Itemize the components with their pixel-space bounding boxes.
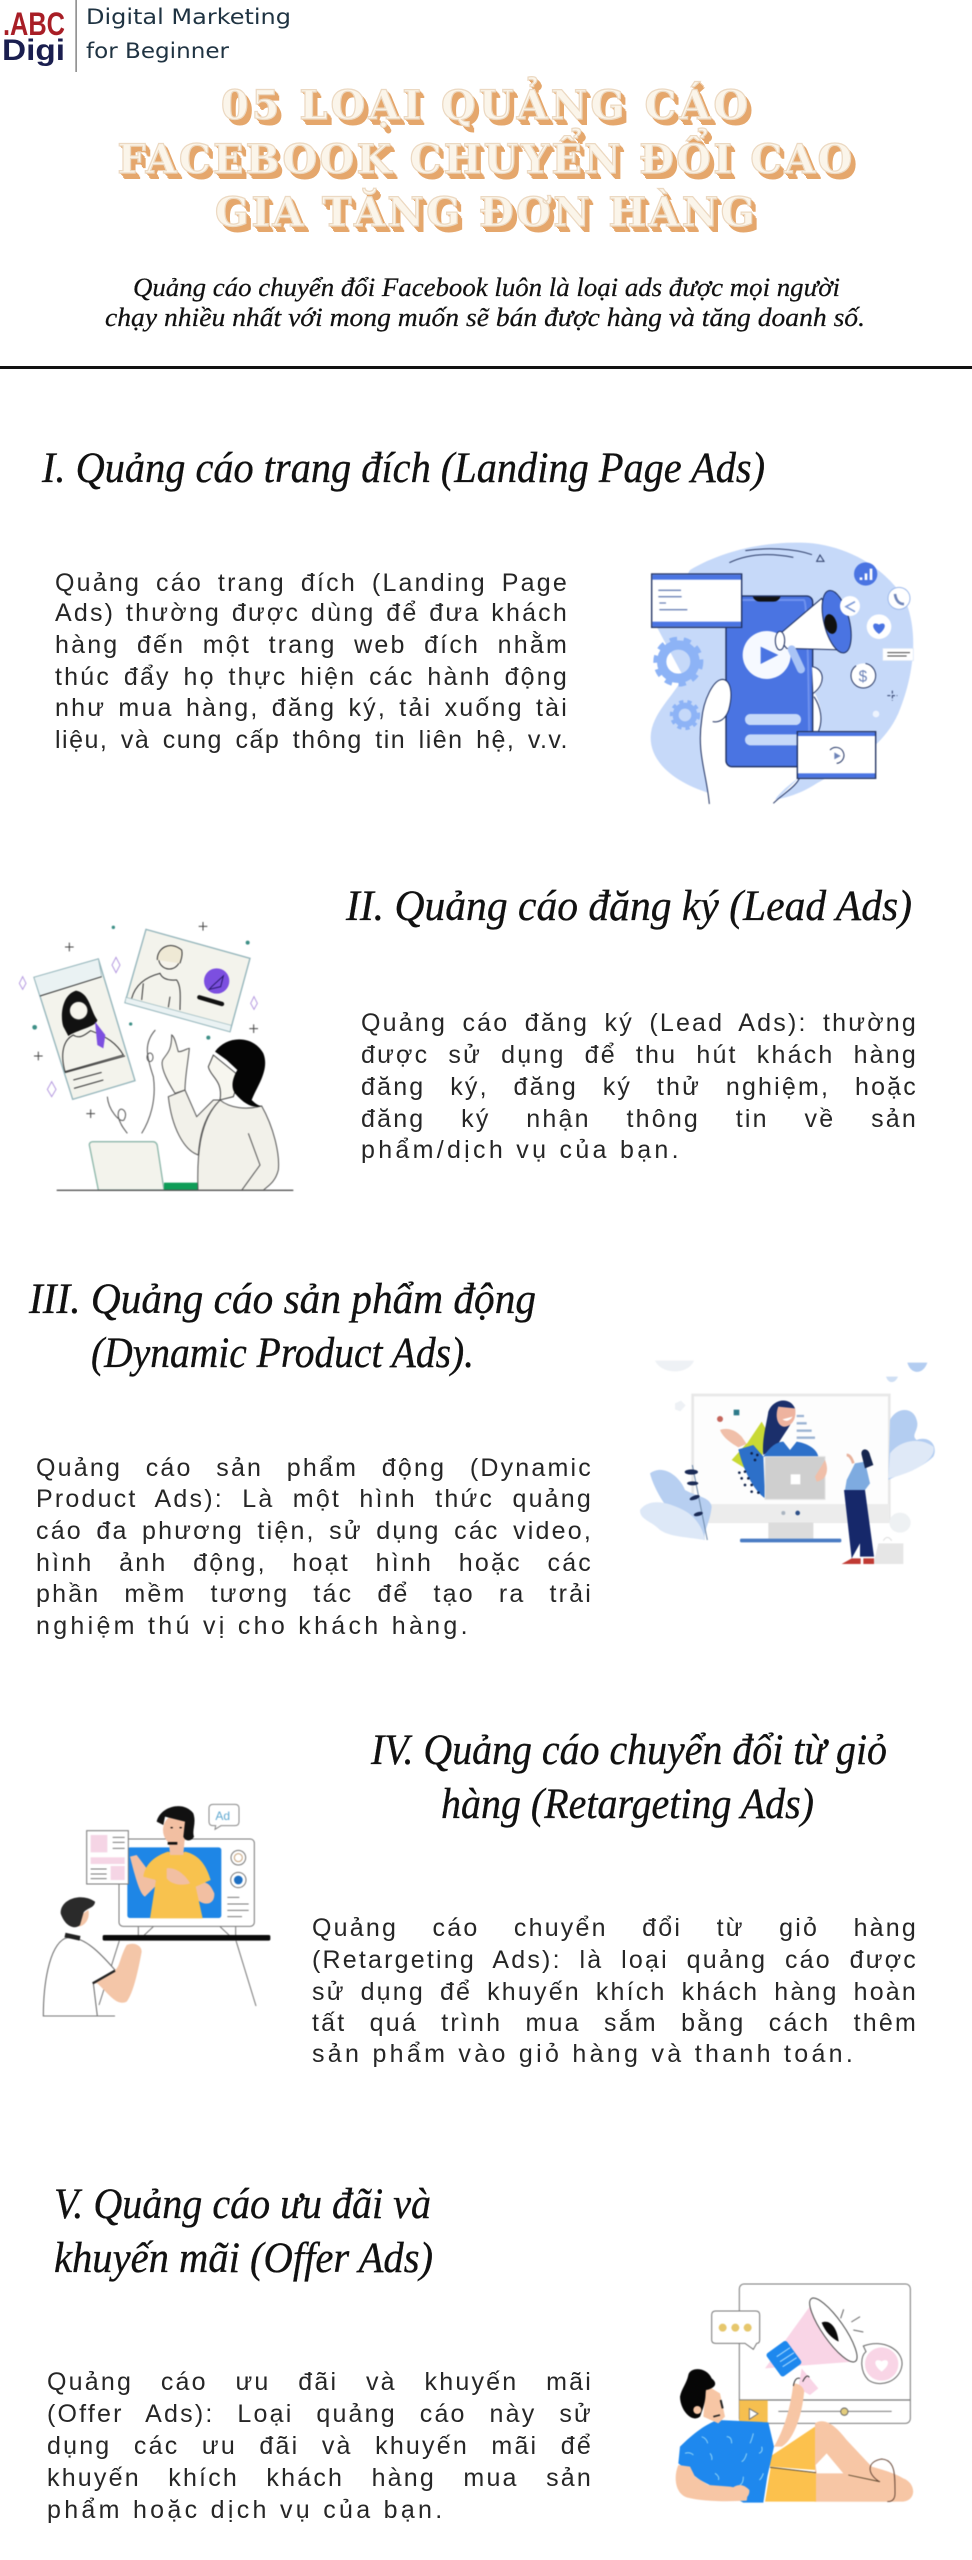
heading: section IV (370, 1727, 887, 1828)
text block: section IV (312, 1914, 918, 2068)
text block: section V: khuyến khích khách hàng mua sản (47, 2464, 593, 2492)
text block: section II: đăng ký, đăng ký thử nghiệm, hoặc (361, 1073, 918, 1101)
text block: section II: đăng ký nhận thông tin về sản (361, 1105, 918, 1133)
intro text: Quảng cáo chuyển đổi Facebook luôn là loại ads được mọi người (133, 273, 840, 302)
text block: section I: như mua hàng, đăng ký, tải xuống tài (55, 694, 569, 722)
illustration: phone with megaphone (650, 542, 914, 805)
text block: section V: dụng các ưu đãi và khuyến mãi để (47, 2432, 593, 2460)
intro text: chạy nhiều nhất với mong muốn sẽ bán được hàng và tăng doanh số. (105, 303, 865, 332)
illustration: woman reclining with megaphone video (675, 2282, 914, 2504)
text block: section III: nghiệm thú vị cho khách hàng. (36, 1612, 471, 1640)
heading: section V (54, 2181, 433, 2282)
text block: section V (47, 2368, 593, 2524)
panel: section III dynamic product ads (28, 1276, 936, 1640)
text block: section III: cáo đa phương tiện, sử dụng các video, (36, 1517, 593, 1545)
text block: section V: Quảng cáo ưu đãi và khuyến mãi (47, 2368, 593, 2396)
text block: section IV: sản phẩm vào giỏ hàng và thanh toán. (312, 2040, 856, 2068)
logo: ABC Digi, Digital Marketing for Beginner: Digi (2, 34, 65, 67)
text block: section IV: sử dụng để khuyến khích khách hàng hoàn (312, 1978, 918, 2006)
panel: section V offer ads (47, 2181, 914, 2524)
panel: section I landing page ads (41, 445, 914, 805)
text block: section I: thúc đẩy họ thực hiện các hành động (55, 663, 569, 691)
text block: section II: phẩm/dịch vụ của bạn. (361, 1136, 682, 1164)
logo: ABC Digi, Digital Marketing for Beginner (2, 0, 291, 72)
title: GIA TĂNG ĐƠN HÀNG (215, 189, 757, 236)
title: 05 LOẠI QUẢNG CÁO (221, 82, 751, 129)
heading: section V: V. Quảng cáo ưu đãi và (54, 2181, 431, 2228)
title: FACEBOOK CHUYỂN ĐỔI CAO (117, 136, 855, 183)
illustration: man watching ad on TV (42, 1803, 272, 2018)
illustration: monitor with presenter (640, 1360, 936, 1565)
text block: section V: phẩm hoặc dịch vụ của bạn. (47, 2496, 446, 2524)
text block: section I: Quảng cáo trang đích (Landing Page (55, 569, 569, 597)
text block: section III: hình ảnh động, hoạt hình hoặc các (36, 1549, 593, 1577)
text block: section IV: Quảng cáo chuyển đổi từ giỏ hàng (312, 1914, 918, 1942)
text block: section V: (Offer Ads): Loại quảng cáo này sử (47, 2400, 593, 2428)
heading: section II: II. Quảng cáo đăng ký (Lead Ads) (345, 883, 912, 930)
intro text (105, 273, 865, 332)
heading: section III (28, 1276, 536, 1377)
illustration: man watching ad on TV: Ad (215, 1809, 230, 1823)
panel: section II lead ads (18, 883, 918, 1192)
text block: section II: Quảng cáo đăng ký (Lead Ads): thường (361, 1009, 918, 1037)
heading: section IV: IV. Quảng cáo chuyển đổi từ giỏ (370, 1727, 887, 1774)
logo: ABC Digi, Digital Marketing for Beginner: for Beginner (86, 39, 229, 63)
heading: section III: (Dynamic Product Ads). (91, 1330, 474, 1377)
panel: section IV retargeting ads (42, 1727, 918, 2068)
heading: section I: I. Quảng cáo trang đích (Landing Page Ads) (41, 445, 765, 492)
illustration: phone with megaphone: $ (859, 669, 868, 686)
text block: section I: liệu, và cung cấp thông tin liên hệ, v.v. (55, 726, 569, 754)
text block: section I: Ads) thường được dùng để đưa khách (55, 599, 569, 627)
text block: section III: Quảng cáo sản phẩm động (Dynamic (36, 1454, 593, 1482)
text block: section IV: tất quá trình mua sắm bằng cách thêm (312, 2009, 918, 2037)
text block: section IV: (Retargeting Ads): là loại quảng cáo được (312, 1946, 918, 1974)
illustration: woman pointing at social cards (18, 921, 294, 1192)
text block: section I (55, 569, 569, 754)
text block: section I: hàng đến một trang web đích nhằm (55, 631, 569, 659)
title (117, 76, 856, 236)
text block: section III: phần mềm tương tác để tạo ra trải (36, 1580, 593, 1608)
text block: section II (361, 1009, 918, 1164)
text block: section III: Product Ads): Là một hình thức quảng (36, 1485, 593, 1513)
heading: section III: III. Quảng cáo sản phẩm động (28, 1276, 536, 1323)
heading: section V: khuyến mãi (Offer Ads) (54, 2235, 433, 2282)
text block: section II: được sử dụng để thu hút khách hàng (361, 1041, 918, 1069)
logo: ABC Digi, Digital Marketing for Beginner: Digital Marketing (86, 5, 291, 29)
heading: section IV: hàng (Retargeting Ads) (441, 1781, 814, 1828)
text block: section III (36, 1454, 593, 1640)
logo: ABC Digi, Digital Marketing for Beginner: .ABC (3, 6, 65, 42)
